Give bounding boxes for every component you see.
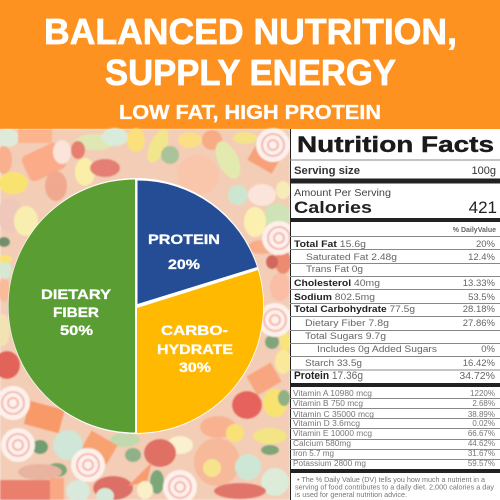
slice: protein 20%: [138, 180, 257, 304]
macronutrient rows: Total Carbohydrate 77.5g: [294, 304, 415, 315]
calories: Amount Per Serving: [294, 187, 391, 199]
pie chart: [8, 178, 264, 434]
daily value header: % DailyValue: [453, 227, 496, 234]
vitamin and mineral rows: 31.67%: [468, 449, 495, 458]
vitamin and mineral rows: 44.62%: [468, 439, 495, 448]
vitamin and mineral rows: Vitamin B 750 mcg: [293, 399, 363, 408]
vitamin and mineral rows: [293, 389, 495, 468]
macronutrient rows: [294, 239, 496, 382]
panel heading: Nutrition Facts: [297, 132, 494, 157]
food collage background: [0, 126, 296, 500]
vitamin and mineral rows: 38.89%: [468, 410, 495, 419]
vitamin and mineral rows: 59.57%: [468, 459, 495, 468]
vitamin and mineral rows: Potassium 2800 mg: [293, 459, 366, 468]
label: protein: PROTEIN: [148, 231, 220, 247]
title: BALANCED NUTRITION,: [44, 11, 457, 52]
macronutrient rows: Includes 0g Added Sugars: [317, 344, 437, 355]
calories: Calories: [294, 198, 372, 217]
macronutrient rows: Total Sugars 9.7g: [305, 331, 386, 342]
macronutrient rows: Saturated Fat 2.48g: [306, 252, 397, 263]
macronutrient rows: Sodium 802.5mg: [294, 292, 375, 303]
macronutrient rows: 34.72%: [459, 370, 495, 382]
title: SUPPLY ENERGY: [105, 52, 396, 93]
vitamin and mineral rows: Vitamin D 3.6mcg: [293, 419, 360, 428]
macronutrient rows: Dietary Fiber 7.8g: [305, 318, 389, 329]
vitamin and mineral rows: 1220%: [470, 389, 495, 398]
footnote: serving of food contributes to a daily diet. 2,000 calories a day: [295, 484, 495, 492]
calories: 421: [469, 198, 497, 217]
macronutrient rows: 13.33%: [463, 278, 496, 289]
calories: [294, 187, 497, 217]
label: protein: 20%: [168, 256, 201, 272]
serving size: Serving size: [294, 165, 360, 177]
macronutrient rows: Total Fat 15.6g: [294, 239, 366, 250]
macronutrient rows: 27.86%: [463, 318, 496, 329]
slice: dietary fiber 50%: [9, 180, 135, 432]
macronutrient rows: Trans Fat 0g: [306, 264, 363, 275]
footnote: • The % Daily Value (DV) tells you how much a nutrient in a: [297, 477, 485, 484]
nutrition facts panel: [290, 129, 500, 500]
vitamin and mineral rows: Iron 5.7 mg: [293, 449, 334, 458]
macronutrient rows: 0%: [481, 344, 496, 355]
label: protein: [148, 231, 220, 272]
vitamin and mineral rows: 2.68%: [472, 399, 495, 408]
macronutrient rows: 53.5%: [468, 292, 496, 303]
vitamin and mineral rows: 66.67%: [468, 429, 495, 438]
vitamin and mineral rows: Calcium 580mg: [293, 439, 351, 448]
label: carbohydrate: [157, 322, 233, 375]
serving size: 100g: [472, 165, 496, 177]
macronutrient rows: Cholesterol 40mg: [294, 278, 380, 289]
label: carbohydrate: HYDRATE: [157, 341, 233, 357]
label: dietary fiber: FIBER: [53, 304, 99, 320]
macronutrient rows: 16.42%: [463, 358, 496, 369]
label: dietary fiber: 50%: [60, 322, 94, 338]
serving size: [294, 165, 496, 177]
label: carbohydrate: CARBO-: [161, 322, 228, 338]
macronutrient rows: 12.4%: [468, 252, 496, 263]
vitamin and mineral rows: Vitamin A 10980 mcg: [293, 389, 372, 398]
macronutrient rows: 20%: [476, 239, 496, 250]
subtitle: LOW FAT, HIGH PROTEIN: [119, 102, 381, 124]
macronutrient rows: Protein 17.36g: [294, 370, 363, 382]
label: dietary fiber: [41, 286, 112, 338]
title: [44, 11, 457, 93]
footnote: [295, 477, 495, 499]
vitamin and mineral rows: 0.02%: [472, 419, 495, 428]
macronutrient rows: 28.18%: [463, 304, 496, 315]
footnote: is used for general nutrition advice.: [295, 492, 407, 499]
vitamin and mineral rows: Vitamin C 35000 mcg: [293, 410, 374, 419]
label: dietary fiber: DIETARY: [41, 286, 112, 302]
vitamin and mineral rows: Vitamin E 10000 mcg: [293, 429, 372, 438]
header banner: [0, 0, 500, 129]
label: carbohydrate: 30%: [179, 359, 212, 375]
macronutrient rows: Starch 33.5g: [305, 358, 362, 369]
slice: carbohydrate 30%: [137, 270, 263, 433]
